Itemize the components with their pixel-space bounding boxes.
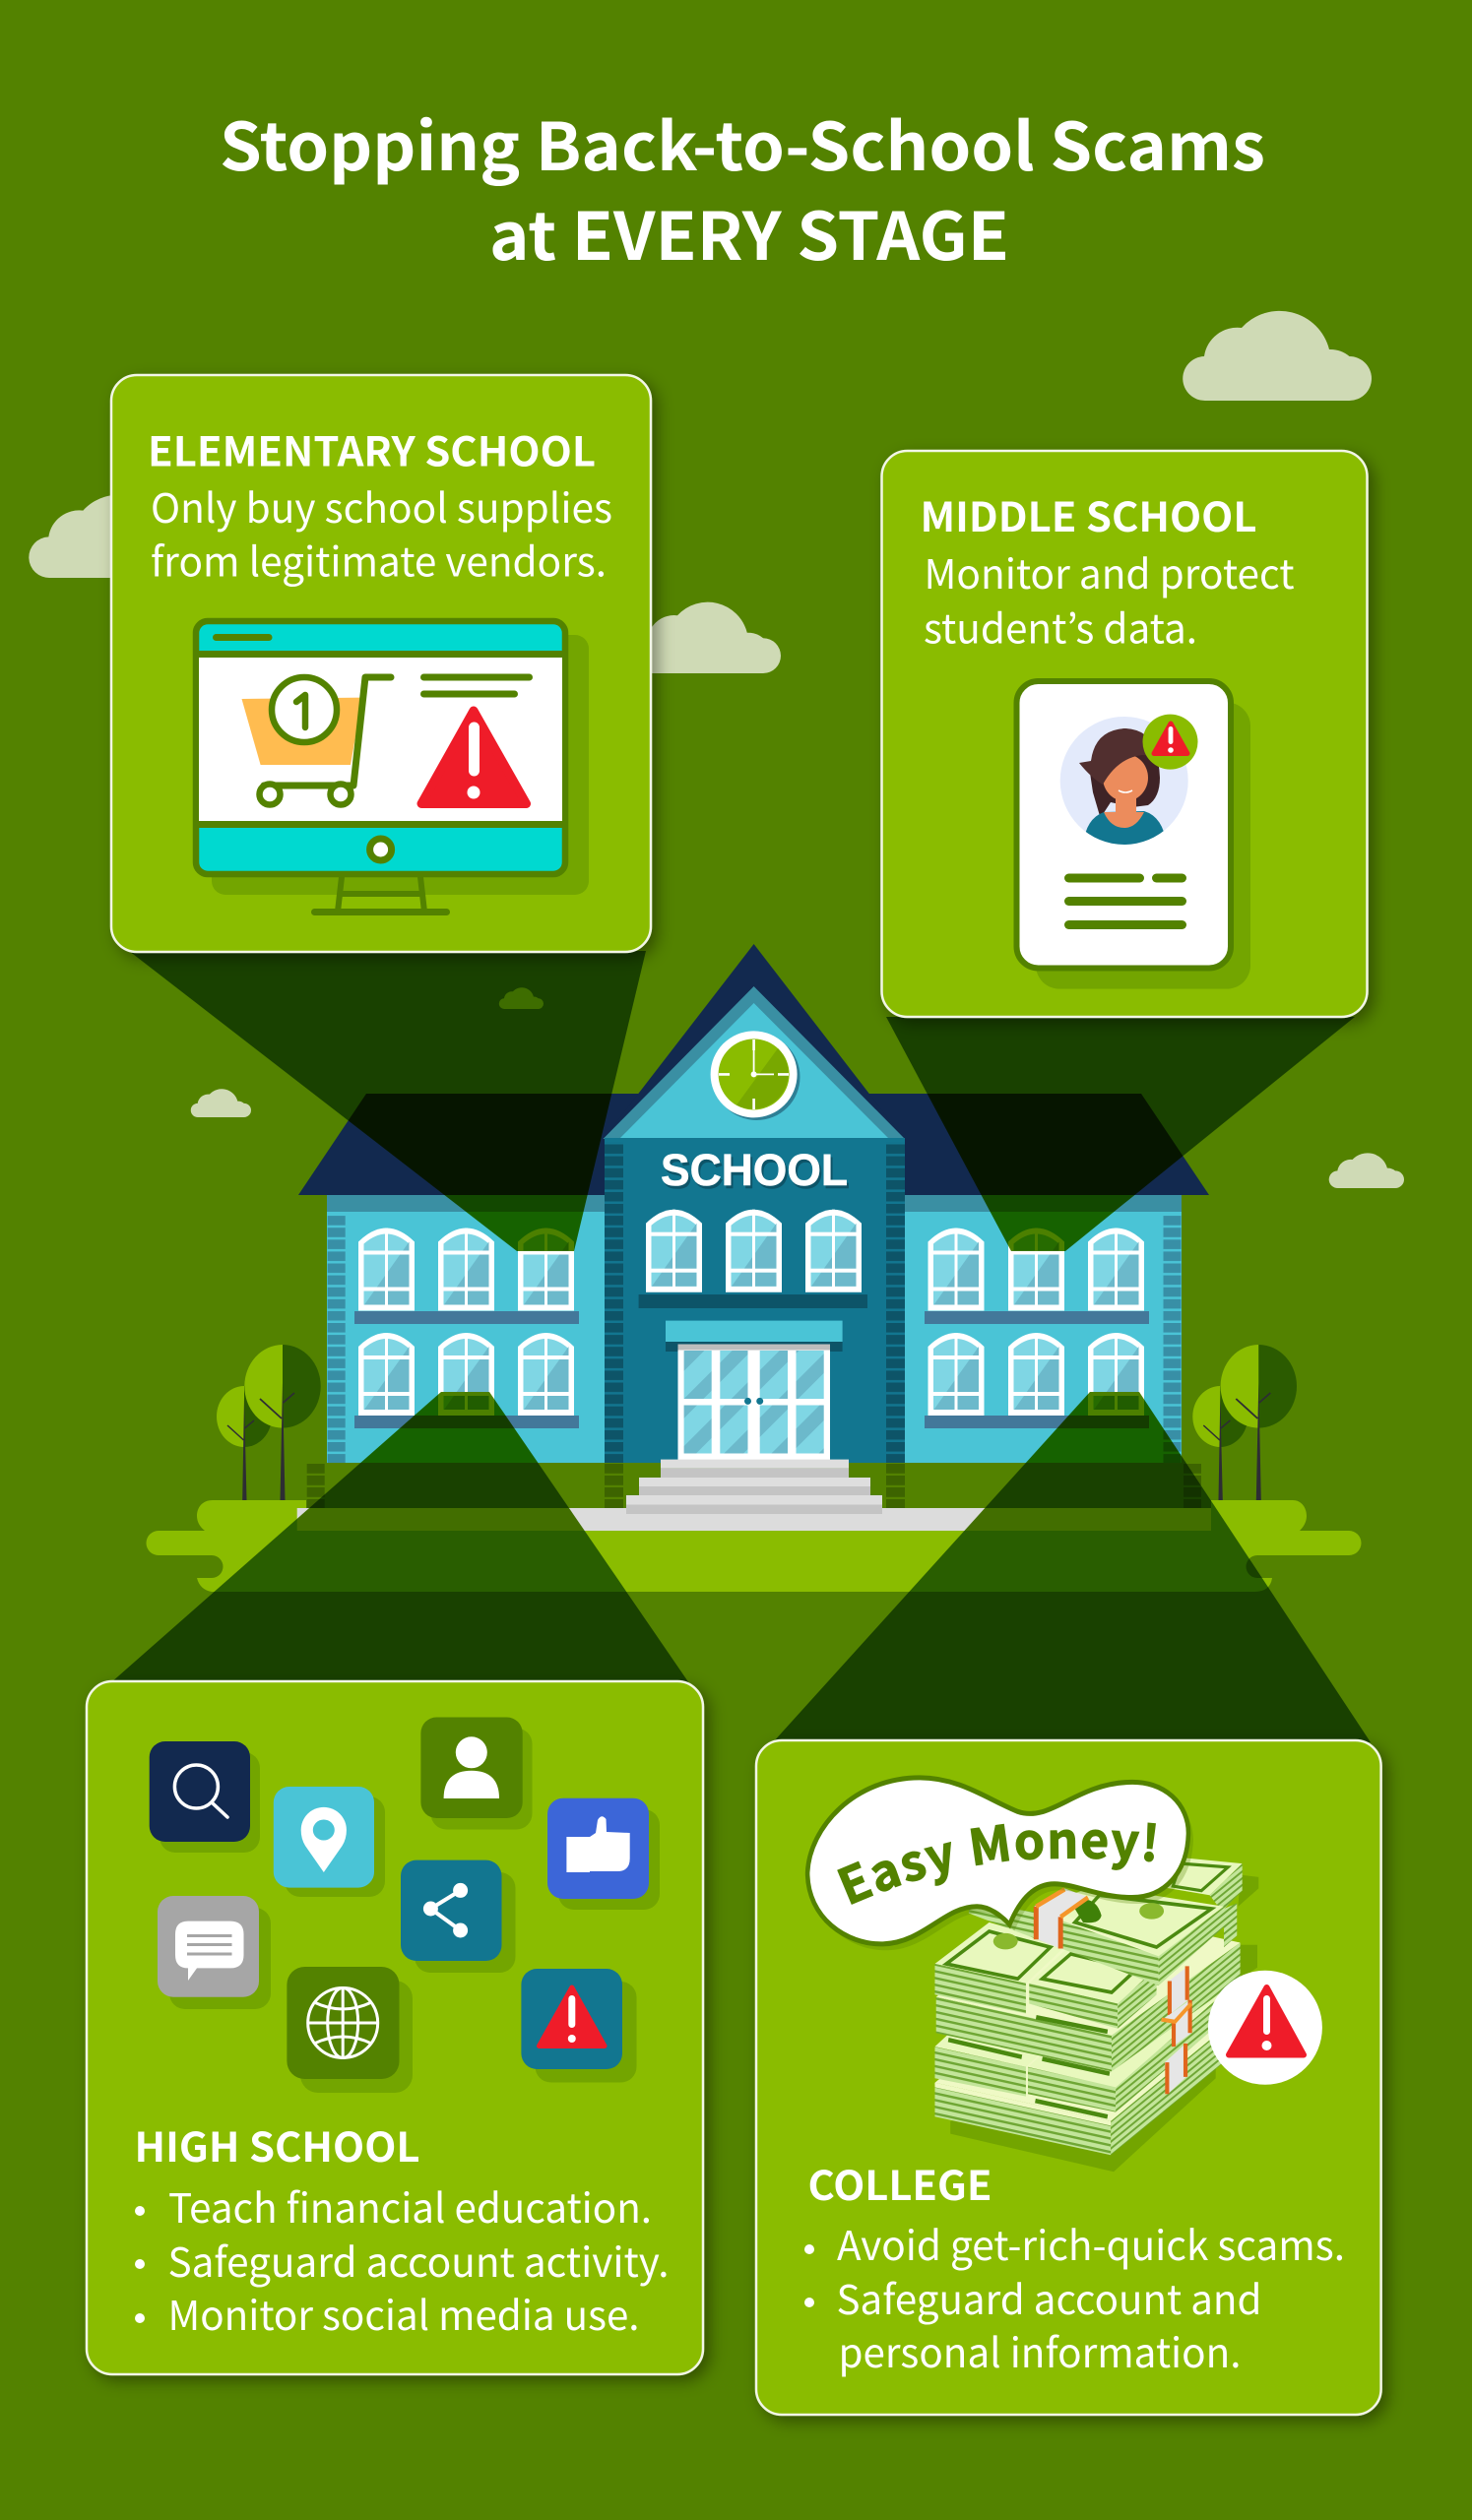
icon: student profile document [1016, 681, 1250, 989]
bullet list: Monitor social media use. [167, 2283, 640, 2342]
fourth level bundles [934, 1922, 1157, 2029]
center block [605, 1138, 905, 1463]
title [220, 94, 1265, 280]
straps [1034, 1888, 1191, 2094]
spotlight beams [110, 951, 1371, 1742]
body text: from legitimate vendors. [151, 530, 607, 589]
trees left [217, 1345, 321, 1500]
icon: person [420, 1717, 532, 1829]
avatar [1060, 717, 1188, 847]
bubble text: Easy Money! [837, 1823, 1156, 1905]
warning triangle [421, 711, 526, 803]
icon: location pin [274, 1787, 385, 1897]
bullet list [135, 2175, 670, 2342]
left wing [327, 1195, 605, 1463]
body text [924, 541, 1294, 656]
cart [242, 677, 391, 805]
icon: search [150, 1741, 260, 1853]
heading: MIDDLE SCHOOL [920, 484, 1256, 543]
heading: HIGH SCHOOL [134, 2114, 419, 2174]
bullet list: personal information. [839, 2320, 1241, 2379]
main roof [603, 944, 905, 1140]
panel: high school [87, 1681, 703, 2374]
door with awning [666, 1321, 843, 1461]
text lines [1064, 874, 1186, 929]
sidewalk [297, 1508, 1211, 1531]
school building [297, 944, 1211, 1531]
third level bundle [936, 1904, 1241, 2071]
icon: money stack [934, 1857, 1258, 2172]
bullet list: Safeguard account activity. [167, 2230, 670, 2289]
school sign: SCHOOL [661, 1145, 848, 1195]
clock [711, 1031, 800, 1120]
icon: warning [521, 1969, 636, 2083]
body text: Monitor and protect [924, 541, 1294, 600]
foundation bricks [307, 1464, 1201, 1508]
wing roofs [298, 1094, 1209, 1195]
title: Stopping Back-to-School Scams [220, 94, 1265, 190]
body text: Only buy school supplies [151, 475, 612, 535]
speech bubble [805, 1775, 1193, 1951]
bullet list: Teach financial education. [168, 2175, 652, 2235]
bullet list [804, 2213, 1345, 2379]
bullet list: Safeguard account and [837, 2267, 1262, 2326]
icon: thumbs up [547, 1798, 660, 1910]
second level bundles [934, 1959, 1241, 2125]
bullet list: Avoid get-rich-quick scams. [837, 2213, 1345, 2272]
warning badge [1208, 1971, 1322, 2085]
icon: globe [287, 1967, 413, 2093]
icon: monitor with shopping cart and warning [196, 621, 589, 915]
body text: student’s data. [924, 597, 1197, 656]
gable [603, 986, 905, 1139]
clouds [29, 311, 1404, 1188]
body text [151, 475, 612, 589]
panel: college [754, 1738, 1396, 2429]
ground [146, 1500, 1361, 1592]
icon: share [401, 1860, 516, 1973]
panel: elementary school [111, 375, 651, 952]
alert badge [1142, 715, 1197, 770]
heading: COLLEGE [807, 2153, 992, 2212]
trees right [1192, 1345, 1297, 1500]
icon: chat [158, 1896, 271, 2009]
heading: ELEMENTARY SCHOOL [148, 419, 596, 478]
panel: middle school [882, 451, 1367, 1017]
right wing [905, 1195, 1182, 1463]
bottom bundle [934, 1977, 1241, 2155]
top bundles [969, 1857, 1243, 1985]
steps [626, 1460, 882, 1514]
title: at EVERY STAGE [489, 184, 1009, 280]
